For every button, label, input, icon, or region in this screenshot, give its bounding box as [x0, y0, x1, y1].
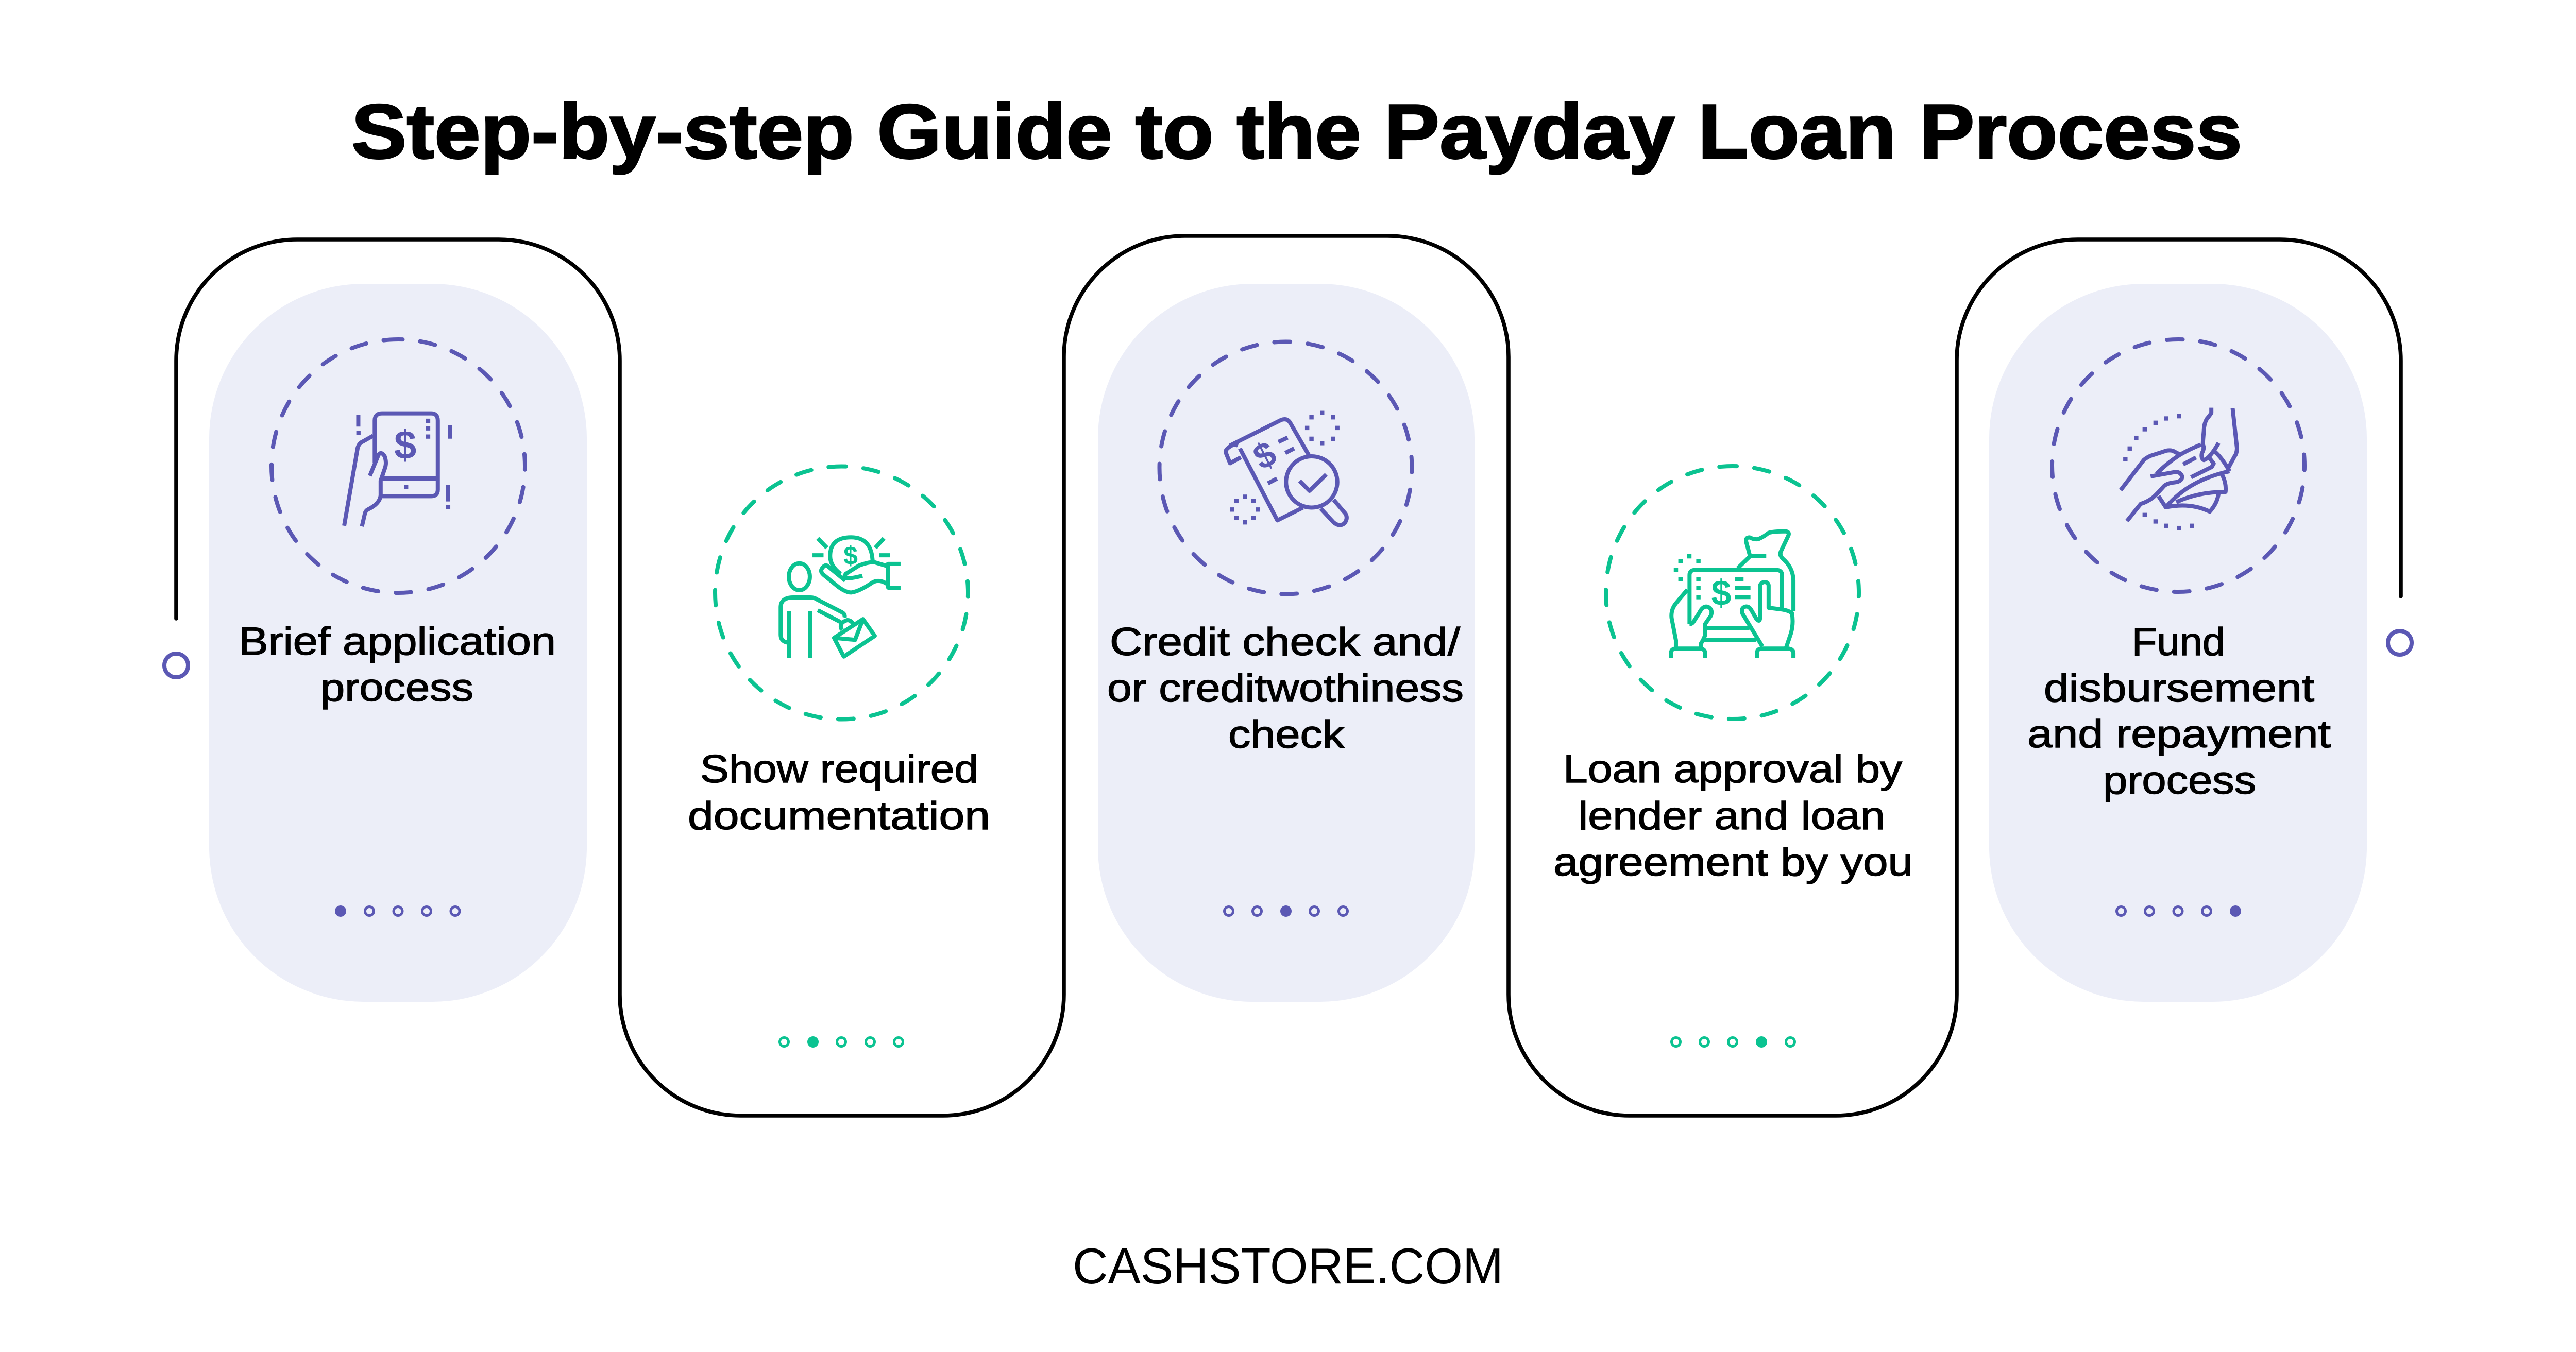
step 2 label	[688, 747, 990, 838]
step 3 label: Credit check and/	[1110, 620, 1461, 664]
step 4 label	[1553, 747, 1913, 884]
icon dollar sign: $	[1711, 573, 1731, 613]
title: Step-by-step Guide to the Payday Loan Process	[351, 88, 2242, 175]
step 1 label	[239, 620, 556, 710]
step 3 background	[1098, 284, 1475, 1002]
step 1 label: process	[320, 666, 473, 710]
panel: step 3 credit check	[1098, 284, 1475, 1002]
step 5 label: Fund	[2132, 620, 2225, 664]
panel: step 1 brief application	[209, 284, 587, 1002]
step 5 label: process	[2103, 759, 2256, 802]
step 3 label: or creditwothiness	[1107, 666, 1464, 710]
icon: hand holding tablet: $	[394, 423, 416, 468]
icon: hand holding tablet	[344, 414, 450, 526]
step 5 label: and repayment	[2027, 712, 2331, 756]
step 5 background	[1989, 284, 2367, 1002]
step 4 label: Loan approval by	[1563, 747, 1902, 791]
step 1 dashed circle	[261, 329, 536, 604]
step 4 label: lender and loan	[1578, 794, 1885, 838]
panel: step 5 fund disbursement	[1989, 284, 2367, 1002]
icon: receipt under magnifier: $	[1247, 433, 1282, 477]
icon: receipt under magnifier	[1226, 411, 1347, 525]
step 2 label: Show required	[700, 747, 978, 791]
step 3 progress dots	[1224, 905, 1348, 917]
step 1 background	[209, 284, 587, 1002]
icon: hands exchanging money	[2121, 408, 2237, 530]
step 3 dashed circle	[1149, 331, 1422, 605]
footer brand: CASHSTORE.COM	[1073, 1238, 1503, 1294]
step 3 label	[1107, 620, 1464, 757]
end marker circle	[2388, 631, 2412, 655]
icon: person with envelope and money in hand	[781, 537, 901, 658]
panel: step 4 loan approval	[1553, 456, 1913, 1048]
step 3 label: check	[1228, 713, 1345, 757]
icon dollar sign: $	[843, 541, 858, 570]
step 1 progress dots	[335, 905, 460, 917]
step 5 dashed circle	[2042, 329, 2315, 602]
step 5 label: disbursement	[2044, 666, 2314, 710]
panel: step 2 required documentation	[688, 456, 990, 1048]
step 4 label: agreement by you	[1553, 841, 1913, 884]
step 5 progress dots	[2116, 905, 2241, 917]
step 4 progress dots	[1671, 1036, 1795, 1048]
step 4 dashed circle	[1596, 456, 1869, 729]
icon: hands on tablet with money bag	[1671, 532, 1793, 658]
serpentine connector line	[176, 236, 2401, 1116]
step 2 dashed circle	[705, 456, 978, 730]
step 1 label: Brief application	[239, 620, 556, 663]
step 5 label	[2027, 620, 2331, 802]
step 2 label: documentation	[688, 794, 990, 838]
start marker circle	[164, 654, 188, 677]
step 2 progress dots	[780, 1036, 903, 1048]
